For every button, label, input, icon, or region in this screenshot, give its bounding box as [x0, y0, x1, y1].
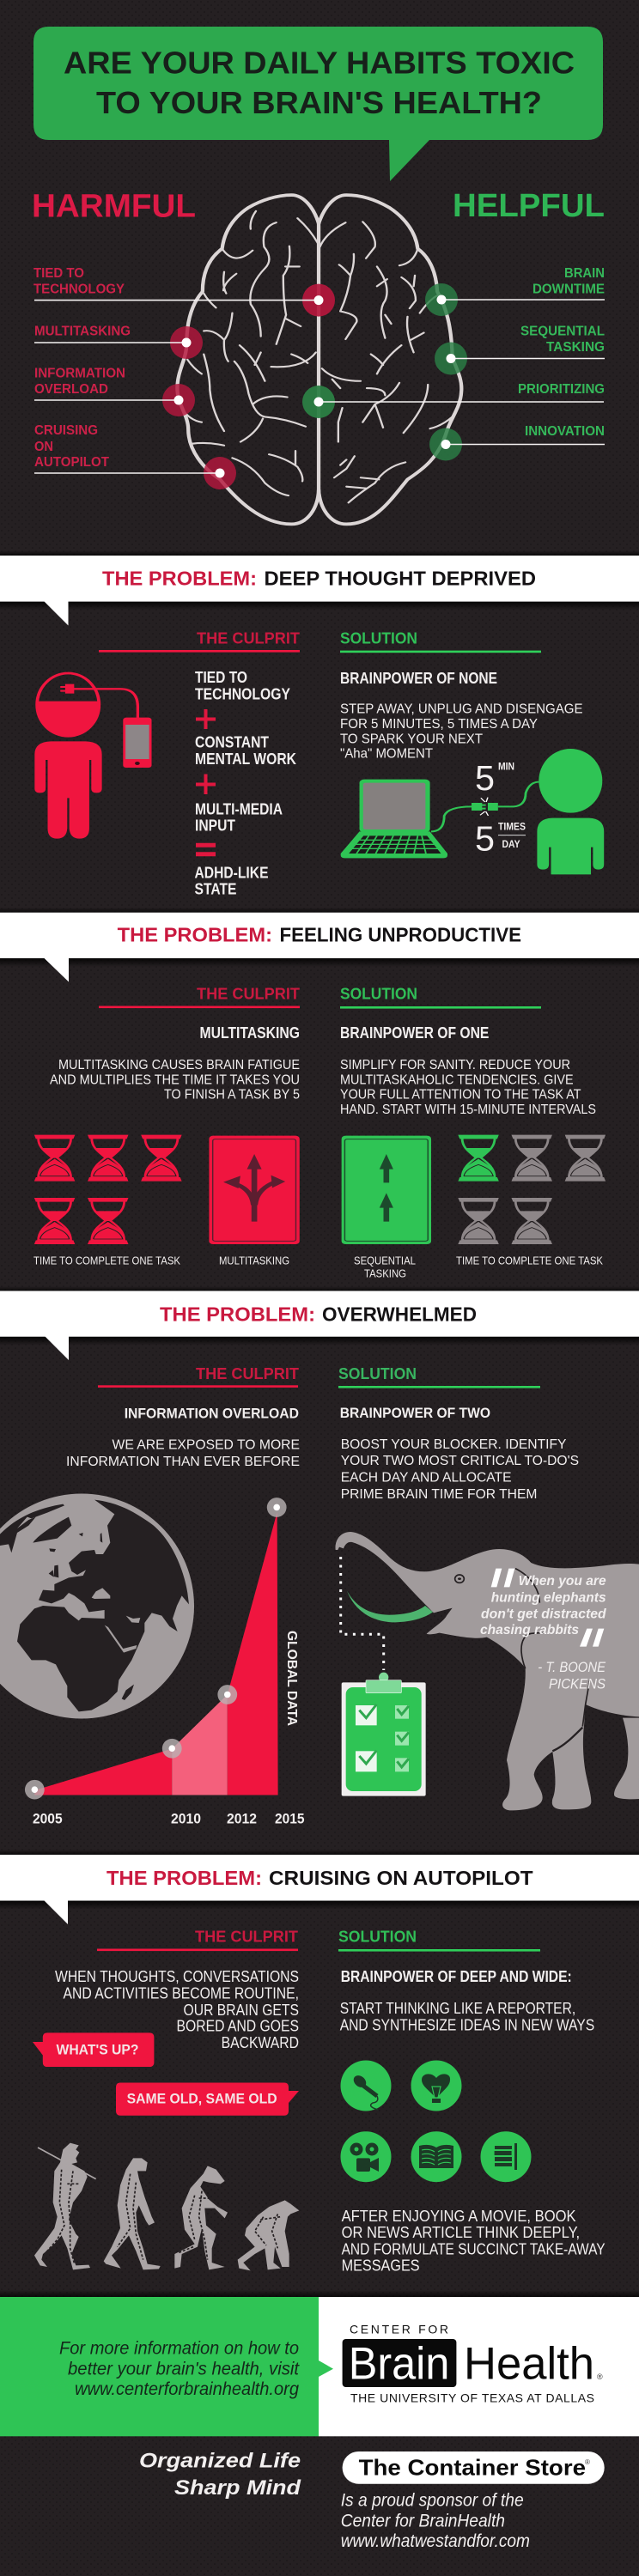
callout: what's up bubble: WHAT'S UP? — [57, 2042, 139, 2058]
text: solution 2: YOUR FULL ATTENTION TO THE TASK AT — [340, 1088, 581, 1103]
quote: T. Boone Pickens: PICKENS — [549, 1675, 606, 1692]
icon: film camera — [340, 2131, 392, 2182]
harmful labels: AUTOPILOT — [34, 455, 109, 470]
text: culprit 2: AND MULTIPLIES THE TIME IT TAKES YOU — [50, 1072, 300, 1087]
stat: 5 min 5 times a day: DAY — [502, 838, 520, 850]
caption row: MULTITASKING — [219, 1255, 289, 1267]
helpful labels: INNOVATION — [525, 424, 605, 439]
icon: one green hourglass and four grey hourglasses — [458, 1135, 606, 1244]
stat: 5 min 5 times a day: TIMES — [498, 821, 526, 833]
text: culprit 2: MULTITASKING — [199, 1024, 300, 1042]
harmful labels: ON — [34, 440, 53, 454]
text: culprit 2: TO FINISH A TASK BY 5 — [164, 1088, 300, 1103]
equation: culprit formula text: TIED TO — [195, 669, 247, 686]
heading: helpful: HELPFUL — [453, 188, 605, 224]
text: culprit 3: INFORMATION THAN EVER BEFORE — [66, 1455, 300, 1469]
stat: 5 min 5 times a day: 5 — [475, 819, 495, 859]
harmful brain hotspots — [34, 284, 335, 489]
text: solution 4: AND SYNTHESIZE IDEAS IN NEW WAYS — [340, 2016, 594, 2033]
text: solution 4: BRAINPOWER OF DEEP AND WIDE: — [341, 1968, 572, 1985]
chart axis labels — [33, 1631, 304, 1827]
chart axis labels: GLOBAL DATA — [284, 1631, 299, 1726]
logo: Center for BrainHealth: ® — [597, 2372, 603, 2381]
helpful labels: BRAIN — [564, 266, 605, 281]
text: culprit 4 — [55, 1968, 299, 2051]
caption row: TIME TO COMPLETE ONE TASK — [456, 1255, 603, 1267]
helpful brain hotspots — [302, 283, 605, 460]
text: solution 3 — [340, 1405, 579, 1502]
equation: culprit formula text: MENTAL WORK — [195, 750, 296, 768]
text: culprit 2: MULTITASKING CAUSES BRAIN FATIGUE — [58, 1058, 300, 1072]
text: solution 2: BRAINPOWER OF ONE — [340, 1024, 489, 1042]
text: solution 4 closing: MESSAGES — [342, 2257, 420, 2275]
tagline: Organized Life — [139, 2449, 301, 2472]
text: culprit 4: OUR BRAIN GETS — [184, 2002, 299, 2019]
title: TO YOUR BRAIN'S HEALTH? — [96, 85, 542, 120]
icon: elephant — [336, 1532, 639, 1810]
icon: globe — [0, 1494, 194, 1719]
quote: T. Boone Pickens: - T. BOONE — [538, 1659, 606, 1675]
equation: culprit formula text: MULTI-MEDIA — [195, 800, 283, 817]
text: solution 3: YOUR TWO MOST CRITICAL TO-DO'S — [341, 1454, 579, 1468]
text: solution 4 closing — [342, 2208, 606, 2275]
equation: culprit formula text — [194, 669, 296, 898]
panel: header speech bubble title — [33, 27, 603, 181]
text: solution 1: TO SPARK YOUR NEXT — [340, 732, 483, 746]
equation: culprit formula text: TECHNOLOGY — [195, 685, 290, 702]
panel: problem 3 heading band: OVERWHELMED — [322, 1303, 477, 1326]
panel: problem 4 heading band: CRUISING ON AUTOPILOT — [269, 1867, 533, 1889]
text: solution 4 closing: OR NEWS ARTICLE THINK DEEPLY, — [342, 2224, 580, 2241]
text: solution 1: BRAINPOWER OF NONE — [340, 670, 497, 687]
text: culprit 3: WE ARE EXPOSED TO MORE — [112, 1438, 300, 1453]
text: solution 1: STEP AWAY, UNPLUG AND DISENGAGE — [340, 702, 582, 717]
icon: laptop unplugged from green person — [341, 749, 604, 874]
text: culprit 4: WHEN THOUGHTS, CONVERSATIONS — [55, 1968, 299, 1985]
text: solution 3: BOOST YOUR BLOCKER. IDENTIFY — [341, 1437, 567, 1452]
helpful labels — [518, 266, 605, 439]
text: culprit 3: INFORMATION OVERLOAD — [125, 1405, 299, 1422]
tagline: Sharp Mind — [174, 2476, 301, 2500]
panel: problem 1 heading band: THE PROBLEM: — [102, 568, 257, 590]
logo: The Container Store — [343, 2451, 605, 2484]
icon: multitasking card with branching arrows — [209, 1136, 300, 1244]
icon: reverse evolution figures — [34, 2143, 299, 2270]
equation: culprit formula text: INPUT — [195, 817, 235, 834]
brain outline illustration — [177, 195, 461, 524]
text: solution 4 — [340, 1968, 594, 2033]
caption row — [33, 1255, 603, 1279]
chart: global data growth — [25, 1498, 287, 1800]
text: culprit 3 — [66, 1405, 300, 1469]
text: solution 2: HAND. START WITH 15-MINUTE INTERVALS — [340, 1103, 596, 1117]
logo: Center for BrainHealth: THE UNIVERSITY OF TEXAS AT DALLAS — [350, 2391, 594, 2405]
quote: T. Boone Pickens: hunting elephants — [491, 1590, 606, 1605]
harmful labels: OVERLOAD — [34, 382, 108, 397]
text: culprit 4: AND ACTIVITIES BECOME ROUTINE, — [64, 1985, 299, 2002]
helpful labels: DOWNTIME — [532, 283, 605, 297]
panel: more information call to action: For more information on how to — [59, 2339, 299, 2359]
quote: T. Boone Pickens: chasing rabbits — [480, 1623, 579, 1637]
callout: same old bubble — [116, 2083, 299, 2116]
text: sponsor note — [341, 2491, 530, 2551]
callout: same old bubble: SAME OLD, SAME OLD — [127, 2090, 277, 2107]
panel: problem 2 heading band: FEELING UNPRODUCTIVE — [280, 924, 521, 946]
icon: microphone — [340, 2061, 392, 2111]
logo: Center for BrainHealth: CENTER FOR — [350, 2322, 448, 2336]
text: solution 3: BRAINPOWER OF TWO — [340, 1405, 490, 1421]
title — [64, 45, 575, 120]
panel: more information call to action: better your brain's health, visit — [68, 2359, 300, 2379]
text: culprit 2 — [50, 1024, 300, 1103]
text: solution 3: PRIME BRAIN TIME FOR THEM — [341, 1487, 537, 1502]
caption row: TASKING — [364, 1267, 406, 1279]
text: solution 2: SIMPLIFY FOR SANITY. REDUCE YOUR — [340, 1058, 570, 1072]
panel: problem 4 heading band: THE PROBLEM: — [106, 1867, 262, 1889]
stat: 5 min 5 times a day — [475, 758, 526, 859]
dotted connector — [341, 1557, 384, 1670]
helpful labels: TASKING — [546, 340, 605, 355]
callout: what's up bubble — [33, 2032, 154, 2067]
quote: T. Boone Pickens: don't get distracted — [481, 1607, 607, 1621]
panel: problem 2 heading band: THE PROBLEM: — [118, 924, 272, 946]
heading: harmful: HARMFUL — [32, 189, 196, 225]
text: solution 4 closing: AND FORMULATE SUCCINCT TAKE-AWAY — [342, 2240, 606, 2257]
title: ARE YOUR DAILY HABITS TOXIC — [64, 45, 575, 81]
text: solution 1: FOR 5 MINUTES, 5 TIMES A DAY — [340, 717, 538, 732]
tagline — [139, 2449, 301, 2500]
harmful labels: TECHNOLOGY — [33, 283, 125, 297]
culprit header 3: THE CULPRIT — [196, 1365, 299, 1382]
helpful labels: SEQUENTIAL — [520, 324, 605, 338]
text: solution 2 — [340, 1024, 596, 1117]
stat: 5 min 5 times a day: 5 — [475, 758, 495, 798]
panel: problem 3 heading band — [0, 1286, 639, 1360]
text: solution 1: "Aha" MOMENT — [340, 747, 433, 762]
icon: checklist clipboard — [342, 1673, 426, 1796]
logo: Center for BrainHealth: Brain — [349, 2339, 449, 2390]
panel: more information call to action: www.centerforbrainhealth.org — [75, 2379, 299, 2399]
text: sponsor note: Center for BrainHealth — [341, 2511, 505, 2530]
harmful labels: MULTITASKING — [34, 324, 131, 338]
panel: problem 1 heading band: DEEP THOUGHT DEPRIVED — [265, 568, 536, 590]
logo: The Container Store: ® — [585, 2458, 590, 2466]
caption row: TIME TO COMPLETE ONE TASK — [33, 1255, 180, 1267]
solution header 1: SOLUTION — [340, 629, 417, 647]
text: solution 3: EACH DAY AND ALLOCATE — [341, 1471, 512, 1485]
culprit header 4: THE CULPRIT — [195, 1929, 298, 1946]
quote: T. Boone Pickens — [480, 1569, 607, 1692]
culprit header 2: THE CULPRIT — [197, 985, 300, 1002]
harmful labels: CRUISING — [34, 423, 98, 438]
solution header 4: SOLUTION — [338, 1929, 417, 1946]
panel: problem 3 heading band: THE PROBLEM: — [160, 1303, 315, 1326]
chart axis labels: 2015 — [275, 1811, 304, 1827]
text: solution 2: MULTITASKAHOLIC TENDENCIES. GIVE — [340, 1072, 574, 1087]
text: sponsor note: Is a proud sponsor of the — [341, 2491, 524, 2511]
text: sponsor note: www.whatwestandfor.com — [341, 2531, 530, 2551]
panel: problem 4 heading band — [0, 1850, 639, 1924]
equation: culprit formula text: CONSTANT — [195, 734, 269, 751]
logo: Center for BrainHealth: Health — [464, 2339, 594, 2390]
quote: T. Boone Pickens: When you are — [519, 1574, 606, 1589]
chart axis labels: 2012 — [227, 1811, 257, 1827]
icon: open book — [411, 2131, 462, 2182]
text: solution 4: START THINKING LIKE A REPORTER, — [340, 2000, 575, 2017]
text: solution 1 — [340, 670, 582, 762]
text: culprit 4: BORED AND GOES — [177, 2018, 299, 2035]
solution header 2: SOLUTION — [340, 985, 417, 1002]
text: solution 4 closing: AFTER ENJOYING A MOVIE, BOOK — [342, 2208, 576, 2225]
equation: culprit formula text: ADHD-LIKE — [194, 864, 268, 881]
icon: red person plugged into phone — [34, 673, 152, 839]
harmful labels: INFORMATION — [34, 367, 125, 381]
icon: five red hourglasses — [34, 1135, 182, 1244]
icon: sequential tasking card with two arrows — [342, 1136, 431, 1244]
text: culprit 4: BACKWARD — [222, 2034, 299, 2051]
harmful labels — [33, 266, 131, 470]
solution header 3: SOLUTION — [338, 1365, 417, 1382]
icon: news article — [481, 2131, 531, 2182]
panel: problem 1 heading band — [0, 550, 639, 625]
logo: Center for BrainHealth — [343, 2322, 603, 2405]
panel: problem 2 heading band — [0, 908, 639, 982]
chart axis labels: 2010 — [171, 1811, 201, 1827]
icon: heart lightbulb — [411, 2061, 462, 2111]
harmful labels: TIED TO — [33, 266, 84, 281]
panel: more information call to action — [0, 2290, 639, 2436]
logo: The Container Store: The Container Store — [359, 2455, 586, 2481]
equation: culprit formula text: STATE — [194, 881, 237, 898]
caption row: SEQUENTIAL — [354, 1255, 416, 1267]
stat: 5 min 5 times a day: MIN — [498, 761, 514, 773]
chart axis labels: 2005 — [33, 1811, 63, 1827]
helpful labels: PRIORITIZING — [518, 382, 605, 397]
culprit header 1: THE CULPRIT — [197, 629, 300, 647]
